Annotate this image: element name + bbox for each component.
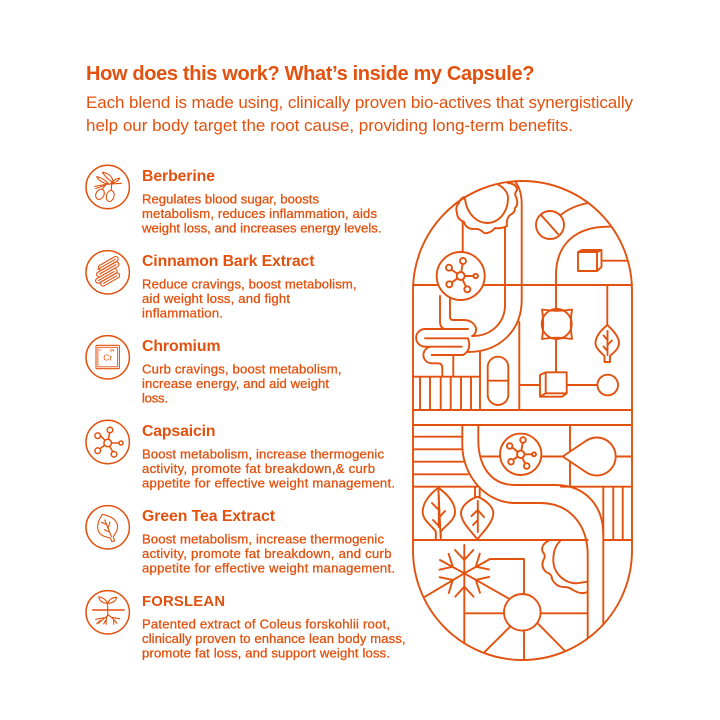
heading: Capsaicin: Capsaicin [142, 423, 216, 440]
description: Cinnamon Bark Extract: inflammation. [142, 306, 223, 320]
panel: Berberine [86, 165, 382, 236]
leaves: lower [423, 487, 493, 540]
heading: Berberine: Berberine [142, 168, 215, 185]
description: Capsaicin: activity, promote fat breakdown,& curb [142, 461, 375, 476]
description: Capsaicin: appetite for effective weight management. [142, 476, 395, 490]
hatching [413, 352, 480, 410]
capsule outline [413, 181, 632, 660]
heading: Green Tea Extract: Green Tea Extract [142, 508, 276, 525]
circle node [597, 375, 618, 395]
description: Capsaicin: Boost metabolism, increase thermogenic [142, 446, 384, 462]
molecule connector and teardrop [482, 425, 632, 487]
cube: top [578, 250, 628, 271]
description: Green Tea Extract: activity, promote fat breakdown, and curb [142, 546, 392, 561]
description: Cinnamon Bark Extract: aid weight loss, and fight [142, 291, 290, 306]
cube: bottom [540, 372, 567, 397]
icon: olive branch [86, 165, 129, 209]
cloud: top [456, 183, 517, 233]
snowflake [425, 545, 524, 643]
icon: chromium element tile: P [99, 348, 102, 352]
description: Green Tea Extract: Boost metabolism, increase thermogenic [142, 532, 384, 546]
icon: sprout with roots [86, 591, 129, 634]
capsule illustration [413, 181, 632, 660]
description: Green Tea Extract [142, 532, 395, 576]
description: Berberine: Regulates blood sugar, boosts [142, 192, 319, 206]
intro text [86, 93, 634, 135]
S pipe [462, 425, 603, 638]
intro text: help our body target the root cause, providing long-term benefits. [86, 116, 573, 135]
pill icon [536, 203, 588, 239]
description: FORSLEAN: Patented extract of Coleus forskohlii root, [142, 616, 390, 632]
description: FORSLEAN: promote fat loss, and support weight loss. [142, 646, 390, 660]
description: Green Tea Extract: appetite for effective weight management. [142, 560, 395, 576]
icon: molecule [86, 420, 129, 464]
description: FORSLEAN [142, 616, 406, 660]
description: Chromium: Curb cravings, boost metabolism, [142, 362, 342, 376]
intro text: Each blend is made using, clinically proven bio-actives that synergistically [86, 93, 634, 112]
panel: FORSLEAN [86, 591, 406, 660]
description: Cinnamon Bark Extract [142, 276, 356, 320]
icon: chromium element tile: 24 [110, 347, 115, 352]
horizontal stripes [413, 437, 632, 487]
top pipe [468, 181, 522, 352]
description: Cinnamon Bark Extract: Reduce cravings, boost metabolism, [142, 276, 356, 292]
panel: Green Tea Extract [86, 506, 395, 576]
connector row [519, 322, 597, 410]
leaf: right [596, 285, 619, 362]
description: Berberine: weight loss, and increases energy levels. [141, 220, 382, 236]
description: Chromium [142, 362, 342, 406]
description: Capsaicin [142, 446, 395, 490]
icon: tea leaf [86, 506, 129, 549]
flower node [542, 309, 572, 372]
right stripes [413, 487, 632, 540]
cloud: bottom [542, 541, 588, 593]
heading: Chromium: Chromium [142, 338, 220, 355]
icon: chromium element tile [86, 336, 129, 379]
capsule pill [488, 357, 508, 405]
icon: cinnamon sticks [86, 251, 129, 294]
description: Chromium: loss. [142, 390, 168, 406]
panel: Cinnamon Bark Extract [86, 251, 356, 320]
sun [464, 594, 588, 660]
panel: Capsaicin [86, 420, 395, 490]
heading: FORSLEAN: FORSLEAN [142, 594, 225, 610]
panel: Chromium [86, 336, 342, 406]
description: FORSLEAN: clinically proven to enhance lean body mass, [142, 631, 406, 646]
curved connector [556, 227, 610, 308]
intestine [416, 296, 476, 377]
description: Berberine: metabolism, reduces inflammation, aids [142, 206, 377, 221]
icon: chromium element tile: Cr [103, 352, 112, 362]
title: How does this work? What’s inside my Capsule? [86, 63, 534, 85]
heading: Cinnamon Bark Extract: Cinnamon Bark Extract [142, 253, 315, 270]
molecule: upper [437, 252, 485, 300]
description: Chromium: increase energy, and aid weight [142, 376, 329, 391]
description: Berberine [141, 192, 382, 236]
